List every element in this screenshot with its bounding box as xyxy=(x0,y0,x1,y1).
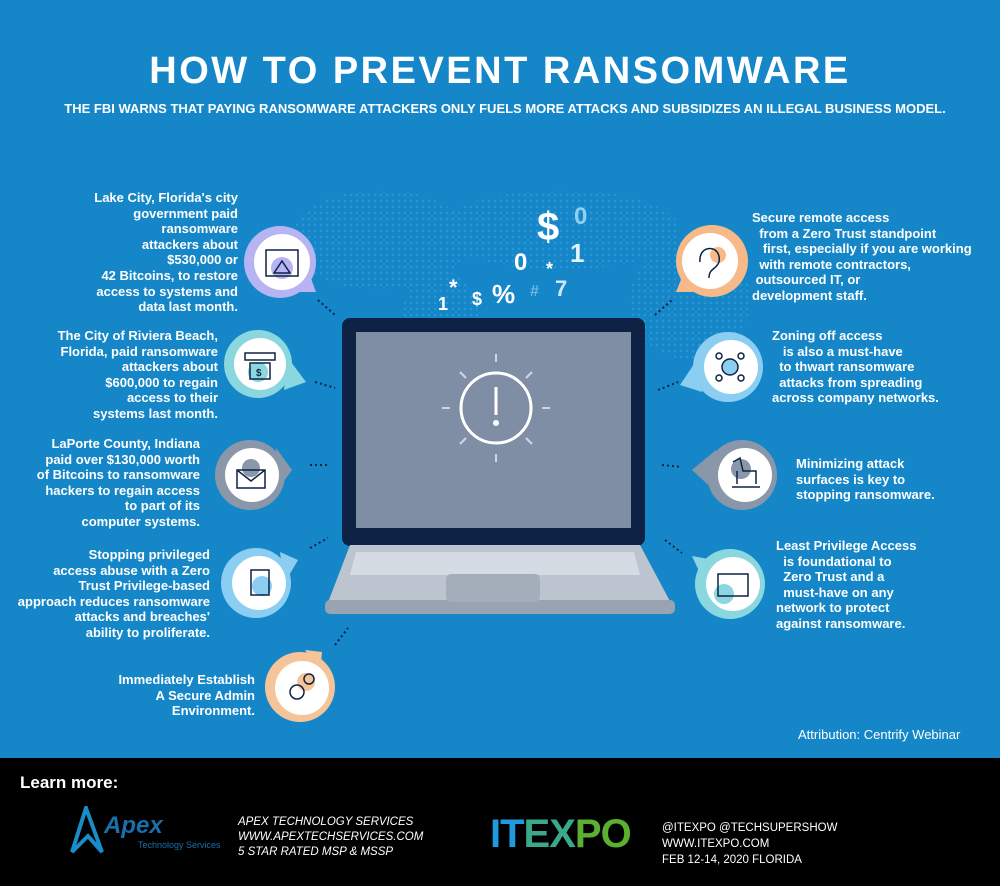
text: riviera beach xyxy=(58,328,218,421)
floating symbols: * xyxy=(546,259,553,279)
text: minimizing: stopping ransomware. xyxy=(796,487,935,502)
text: minimizing xyxy=(796,456,935,502)
bubble: zoning xyxy=(680,332,763,402)
itexpo info: FEB 12-14, 2020 FLORIDA xyxy=(662,854,802,866)
text: lake city: access to systems and xyxy=(96,284,238,299)
text: laporte: to part of its xyxy=(125,498,200,513)
world map dots xyxy=(290,190,750,390)
text: admin: A Secure Admin xyxy=(156,688,255,703)
floating symbols: $ xyxy=(537,205,559,249)
itexpo info: WWW.ITEXPO.COM xyxy=(662,838,769,850)
apex logo: Apex xyxy=(104,812,163,839)
apex info: APEX TECHNOLOGY SERVICES xyxy=(238,816,413,828)
text: riviera beach: access to their xyxy=(127,390,218,405)
floating symbols: * xyxy=(449,275,458,300)
text: zoning: Zoning off access xyxy=(772,328,883,343)
text: remote access: with remote contractors, xyxy=(759,257,911,272)
learn more: Learn more: xyxy=(20,773,118,792)
floating symbols xyxy=(438,203,587,314)
itexpo logo: ITEXPO xyxy=(490,812,631,856)
text: minimizing: Minimizing attack xyxy=(796,456,904,471)
text: lake city: 42 Bitcoins, to restore xyxy=(101,268,238,283)
floating symbols: 0 xyxy=(514,249,527,276)
text: lake city: government paid xyxy=(133,206,238,221)
floating symbols: 1 xyxy=(438,294,448,314)
bubble: least privilege xyxy=(692,549,765,619)
bubble: remote access xyxy=(676,225,748,297)
floating symbols: # xyxy=(530,283,539,300)
text: stopping privileged: ability to proliferate. xyxy=(86,625,210,640)
text: stopping privileged: Stopping privileged xyxy=(89,547,210,562)
text: riviera beach: $600,000 to regain xyxy=(105,375,218,390)
title: HOW TO PREVENT RANSOMWARE xyxy=(149,50,851,92)
text: riviera beach: The City of Riviera Beach, xyxy=(58,328,218,343)
text: lake city: Lake City, Florida's city xyxy=(94,190,238,205)
text: lake city xyxy=(94,190,238,314)
text: laporte: paid over $130,000 worth xyxy=(45,452,200,467)
text: remote access: Secure remote access xyxy=(752,210,889,225)
footer xyxy=(0,758,1000,886)
text: remote access xyxy=(752,210,972,303)
text: least privilege: network to protect xyxy=(776,600,889,615)
text: stopping privileged xyxy=(18,547,210,640)
bubble: riviera xyxy=(224,330,306,398)
bubble: lake city xyxy=(244,226,316,298)
text: laporte xyxy=(37,436,200,529)
floating symbols: % xyxy=(492,279,515,309)
text: zoning: to thwart ransomware xyxy=(779,359,914,374)
text: zoning xyxy=(772,328,939,405)
text: least privilege: Least Privilege Access xyxy=(776,538,916,553)
text: lake city: $530,000 or xyxy=(167,252,238,267)
text: remote access: from a Zero Trust standpoint xyxy=(759,226,936,241)
text: stopping privileged: attacks and breaches' xyxy=(75,609,210,624)
bubble: admin xyxy=(265,650,335,722)
apex info: WWW.APEXTECHSERVICES.COM xyxy=(238,831,423,843)
text: stopping privileged: access abuse with a Zero xyxy=(53,563,210,578)
text: lake city: ransomware xyxy=(161,221,238,236)
text: admin: Environment. xyxy=(172,703,255,718)
floating symbols: 0 xyxy=(574,203,587,230)
text: zoning: attacks from spreading xyxy=(779,375,922,390)
attribution: Attribution: Centrify Webinar xyxy=(798,727,960,742)
text: stopping privileged: Trust Privilege-based xyxy=(78,578,210,593)
text: riviera beach: Florida, paid ransomware xyxy=(60,344,218,359)
text: laporte: LaPorte County, Indiana xyxy=(51,436,200,451)
floating symbols: 7 xyxy=(555,276,567,301)
dotted connectors xyxy=(310,300,682,645)
text: least privilege xyxy=(776,538,916,631)
text: lake city: data last month. xyxy=(138,299,238,314)
subtitle: THE FBI WARNS THAT PAYING RANSOMWARE ATTACKERS ONLY FUELS MORE ATTACKS AND SUBSIDIZES AN ILLEGAL BUSINESS MODEL. xyxy=(64,101,946,116)
text: remote access: first, especially if you are working xyxy=(763,241,972,256)
text: laporte: hackers to regain access xyxy=(45,483,200,498)
apex logo xyxy=(70,806,221,854)
laptop xyxy=(325,318,675,614)
text: minimizing: surfaces is key to xyxy=(796,472,905,487)
text: least privilege: Zero Trust and a xyxy=(783,569,884,584)
text: lake city: attackers about xyxy=(142,237,238,252)
text: laporte: computer systems. xyxy=(82,514,200,529)
text: least privilege: must-have on any xyxy=(783,585,894,600)
apex logo: Technology Services xyxy=(138,840,221,850)
text: zoning: is also a must-have xyxy=(783,344,903,359)
apex info xyxy=(238,816,424,858)
bubble: riviera: $ xyxy=(256,368,262,379)
text: admin: Immediately Establish xyxy=(118,672,255,687)
text: least privilege: against ransomware. xyxy=(776,616,905,631)
itexpo info xyxy=(662,822,838,866)
warning icon xyxy=(442,354,550,462)
bubble: laporte xyxy=(215,440,292,510)
apex info: 5 STAR RATED MSP & MSSP xyxy=(238,846,393,858)
bubble: minimizing xyxy=(692,440,777,510)
floating symbols: $ xyxy=(472,289,482,309)
bubble: stopping privileged xyxy=(221,548,298,618)
itexpo info: @ITEXPO @TECHSUPERSHOW xyxy=(662,822,837,834)
text: remote access: outsourced IT, or xyxy=(756,272,860,287)
text: laporte: of Bitcoins to ransomware xyxy=(37,467,200,482)
text: least privilege: is foundational to xyxy=(783,554,892,569)
text: stopping privileged: approach reduces ransomware xyxy=(18,594,210,609)
text: remote access: development staff. xyxy=(752,288,867,303)
floating symbols: 1 xyxy=(570,238,584,268)
text: riviera beach: systems last month. xyxy=(93,406,218,421)
text: admin xyxy=(118,672,255,718)
text: zoning: across company networks. xyxy=(772,390,939,405)
text: riviera beach: attackers about xyxy=(122,359,218,374)
